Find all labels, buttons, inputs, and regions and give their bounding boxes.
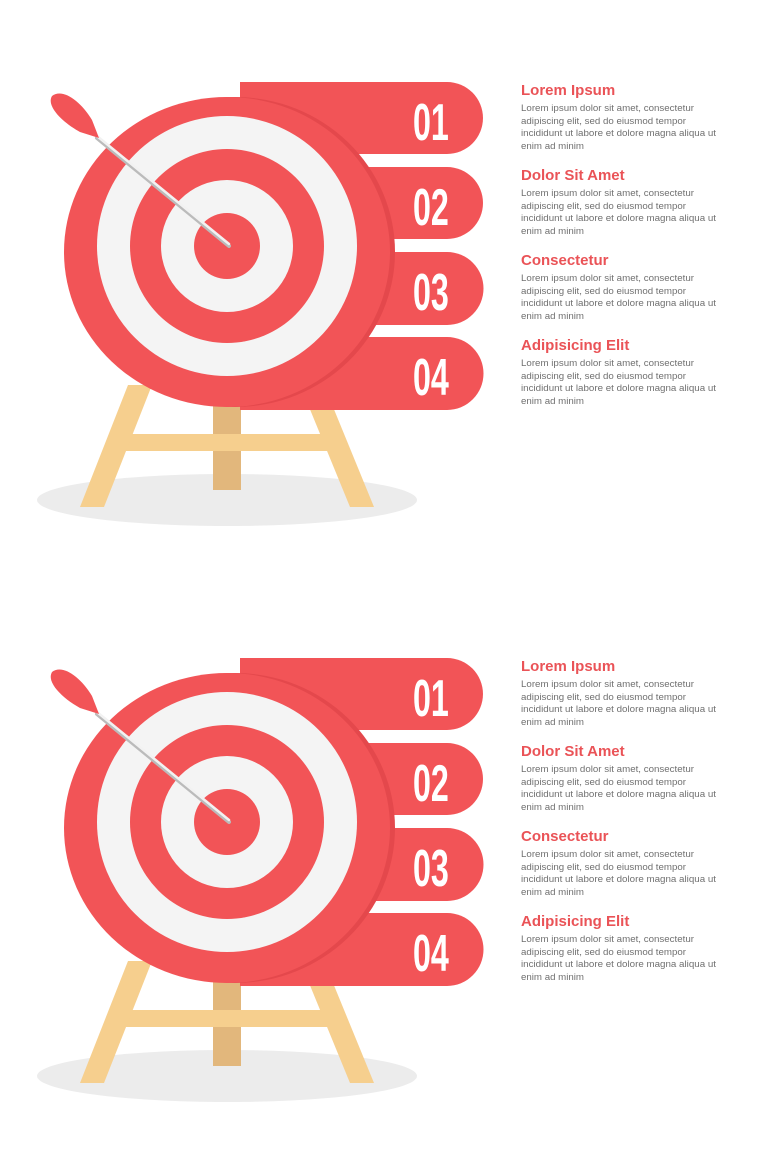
tab 04: 04 bbox=[413, 349, 449, 407]
tab 03: 03 bbox=[413, 264, 449, 322]
item 1 text: Lorem Ipsum bbox=[521, 658, 615, 675]
infographic block 1 bbox=[37, 82, 717, 526]
item 4 text: adipiscing elit, sed do eiusmod tempor bbox=[521, 371, 686, 381]
item 4 text: adipiscing elit, sed do eiusmod tempor bbox=[521, 947, 686, 957]
item 2 text: adipiscing elit, sed do eiusmod tempor bbox=[521, 777, 686, 787]
item 2 text: adipiscing elit, sed do eiusmod tempor bbox=[521, 201, 686, 211]
item 1 text bbox=[521, 658, 717, 727]
item 2 text: Lorem ipsum dolor sit amet, consectetur bbox=[521, 188, 694, 198]
item 4 text: Lorem ipsum dolor sit amet, consectetur bbox=[521, 358, 694, 368]
item 4 text: enim ad minim bbox=[521, 972, 584, 982]
item 1 text bbox=[521, 82, 717, 151]
stand shadow bbox=[37, 474, 417, 526]
easel stand bbox=[80, 956, 374, 1083]
item 4 text: incididunt ut labore et dolore magna aliqua ut bbox=[521, 959, 717, 969]
item 3 text: incididunt ut labore et dolore magna aliqua ut bbox=[521, 874, 717, 884]
easel stand bbox=[80, 380, 374, 507]
tab 04 bbox=[240, 337, 484, 410]
item 3 text: enim ad minim bbox=[521, 887, 584, 897]
target board bbox=[64, 97, 395, 407]
infographic block 2 bbox=[37, 658, 717, 1102]
item 4 text bbox=[521, 913, 717, 982]
tab 03 bbox=[240, 828, 484, 901]
tab 02: 02 bbox=[413, 755, 449, 813]
stand shadow bbox=[37, 1050, 417, 1102]
tab 03: 03 bbox=[413, 840, 449, 898]
item 1 text: enim ad minim bbox=[521, 141, 584, 151]
target board bbox=[64, 673, 395, 983]
tab 01 bbox=[240, 658, 483, 730]
item 1 text: enim ad minim bbox=[521, 717, 584, 727]
item 3 text: Lorem ipsum dolor sit amet, consectetur bbox=[521, 273, 694, 283]
arrow bbox=[51, 93, 229, 246]
item 4 text: Adipisicing Elit bbox=[521, 913, 629, 930]
item 3 text bbox=[521, 828, 717, 897]
item 3 text: adipiscing elit, sed do eiusmod tempor bbox=[521, 286, 686, 296]
item 3 text: Lorem ipsum dolor sit amet, consectetur bbox=[521, 849, 694, 859]
item 2 text bbox=[521, 743, 717, 812]
arrow bbox=[51, 669, 229, 822]
item 1 text: Lorem Ipsum bbox=[521, 82, 615, 99]
tab 01: 01 bbox=[413, 670, 449, 728]
tab 01 bbox=[240, 82, 483, 154]
item 1 text: Lorem ipsum dolor sit amet, consectetur bbox=[521, 103, 694, 113]
item 2 text: enim ad minim bbox=[521, 802, 584, 812]
item 2 text: Lorem ipsum dolor sit amet, consectetur bbox=[521, 764, 694, 774]
item 4 text: Lorem ipsum dolor sit amet, consectetur bbox=[521, 934, 694, 944]
tab 01: 01 bbox=[413, 94, 449, 152]
item 4 text bbox=[521, 337, 717, 406]
item 3 text: Consectetur bbox=[521, 828, 609, 845]
item 2 text: incididunt ut labore et dolore magna aliqua ut bbox=[521, 213, 717, 223]
tab 02: 02 bbox=[413, 179, 449, 237]
item 3 text bbox=[521, 252, 717, 321]
item 2 text: enim ad minim bbox=[521, 226, 584, 236]
tab 02 bbox=[240, 167, 483, 239]
item 1 text: incididunt ut labore et dolore magna aliqua ut bbox=[521, 128, 717, 138]
item 3 text: incididunt ut labore et dolore magna aliqua ut bbox=[521, 298, 717, 308]
tab 03 bbox=[240, 252, 484, 325]
item 3 text: adipiscing elit, sed do eiusmod tempor bbox=[521, 862, 686, 872]
item 3 text: enim ad minim bbox=[521, 311, 584, 321]
item 1 text: adipiscing elit, sed do eiusmod tempor bbox=[521, 692, 686, 702]
item 2 text bbox=[521, 167, 717, 236]
item 3 text: Consectetur bbox=[521, 252, 609, 269]
tab 02 bbox=[240, 743, 483, 815]
item 2 text: Dolor Sit Amet bbox=[521, 743, 625, 760]
item 2 text: incididunt ut labore et dolore magna aliqua ut bbox=[521, 789, 717, 799]
item 4 text: Adipisicing Elit bbox=[521, 337, 629, 354]
item 1 text: adipiscing elit, sed do eiusmod tempor bbox=[521, 116, 686, 126]
tab 04 bbox=[240, 913, 484, 986]
item 2 text: Dolor Sit Amet bbox=[521, 167, 625, 184]
item 4 text: incididunt ut labore et dolore magna aliqua ut bbox=[521, 383, 717, 393]
item 1 text: Lorem ipsum dolor sit amet, consectetur bbox=[521, 679, 694, 689]
item 4 text: enim ad minim bbox=[521, 396, 584, 406]
tab 04: 04 bbox=[413, 925, 449, 983]
item 1 text: incididunt ut labore et dolore magna aliqua ut bbox=[521, 704, 717, 714]
